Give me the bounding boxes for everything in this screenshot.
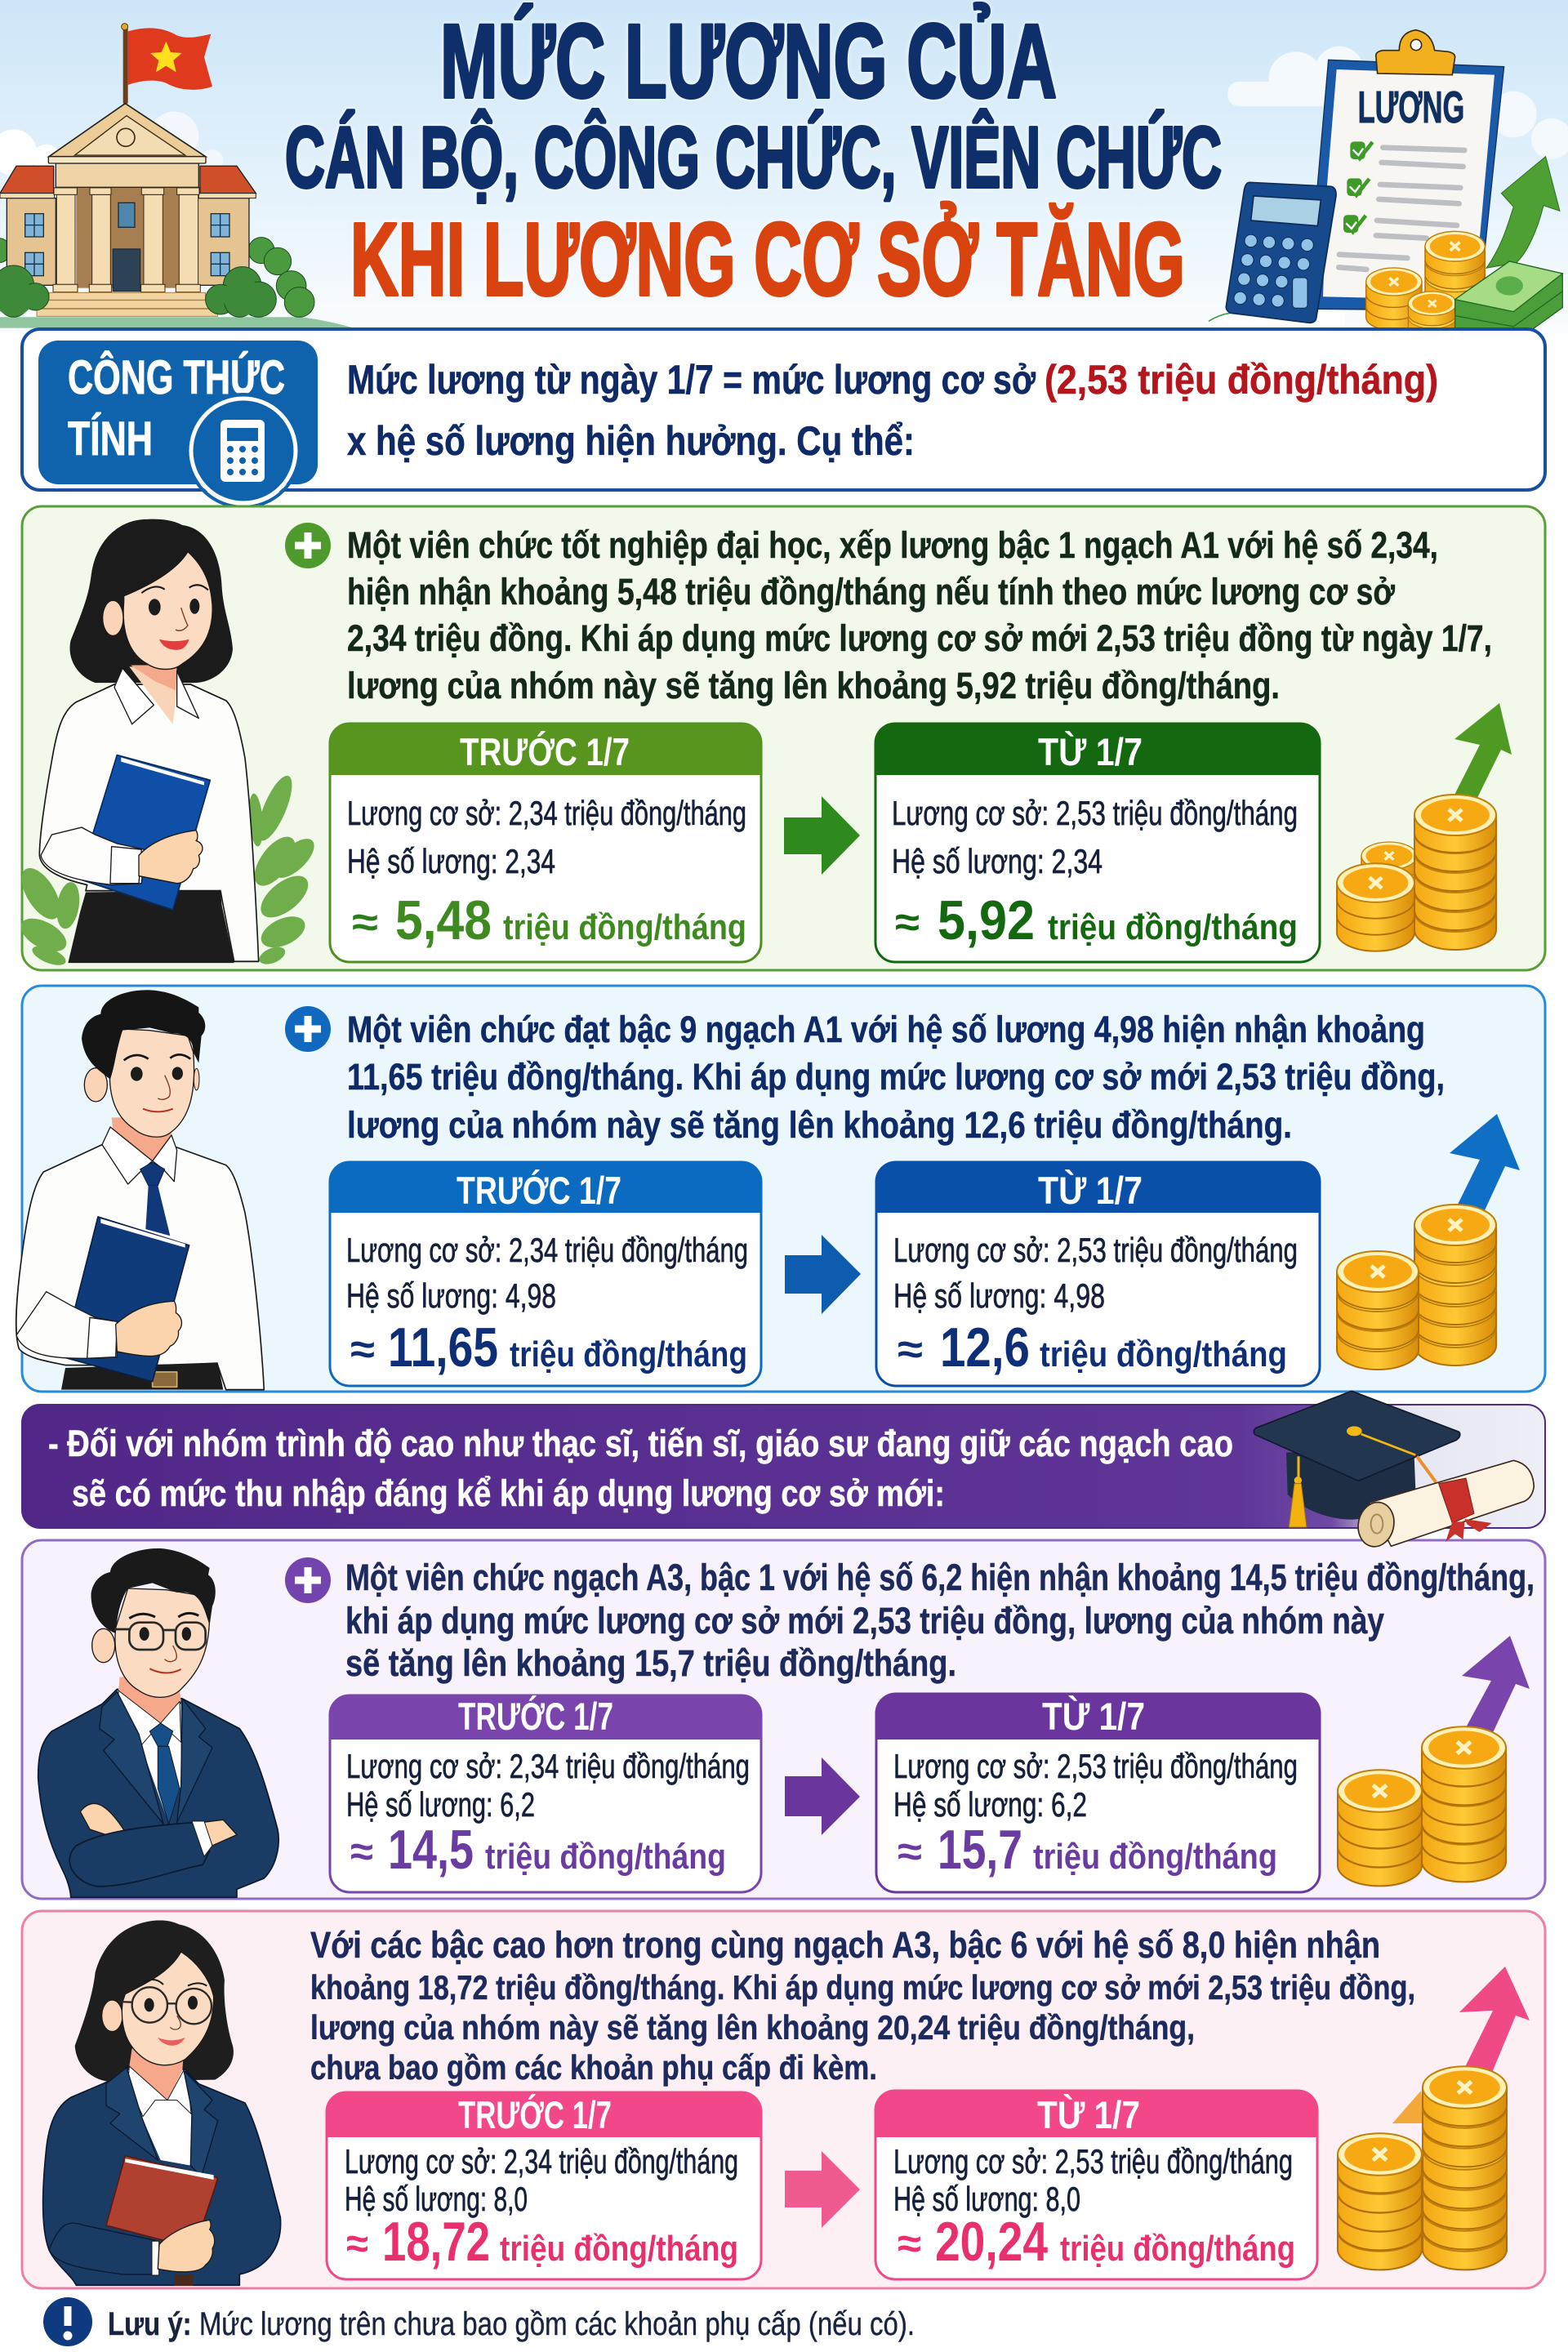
- card: from 1/7: Hệ số lương: 8,0: [893, 2180, 1080, 2218]
- description text: [310, 1924, 1415, 2087]
- card: before 1/7: ≈: [346, 2221, 368, 2266]
- card: before 1/7: TRƯỚC 1/7: [458, 1695, 613, 1738]
- icon: salary clipboard, calculator, coins and cash: [1209, 30, 1568, 343]
- card: before 1/7: Lương cơ sở: 2,34 triệu đồng/tháng: [346, 1231, 748, 1269]
- card: from 1/7: Hệ số lương: 4,98: [893, 1276, 1105, 1315]
- card: from 1/7: [876, 1162, 1320, 1386]
- card: before 1/7: 11,65: [388, 1316, 498, 1379]
- card: from 1/7: 5,92: [938, 889, 1035, 951]
- description text: Với các bậc cao hơn trong cùng ngạch A3, bậc 6 với hệ số 8,0 hiện nhận: [310, 1924, 1380, 1966]
- banner text: sẽ có mức thu nhập đáng kể khi áp dụng lương cơ sở mới:: [72, 1472, 945, 1514]
- card: before 1/7: 14,5: [388, 1819, 474, 1881]
- card: from 1/7: triệu đồng/tháng: [1033, 1837, 1277, 1877]
- card: from 1/7: 12,6: [940, 1316, 1030, 1379]
- description text: [347, 524, 1492, 706]
- card: before 1/7: Lương cơ sở: 2,34 triệu đồng/tháng: [345, 2142, 738, 2180]
- card: before 1/7: Hệ số lương: 4,98: [346, 1276, 556, 1315]
- card: before 1/7: Hệ số lương: 2,34: [347, 842, 555, 880]
- card: before 1/7: triệu đồng/tháng: [510, 1334, 747, 1374]
- description text: sẽ tăng lên khoảng 15,7 triệu đồng/tháng.: [345, 1642, 956, 1684]
- card: from 1/7: TỪ 1/7: [1042, 1695, 1145, 1738]
- card: before 1/7: 18,72: [382, 2211, 490, 2273]
- icon: exclamation: [43, 2297, 92, 2346]
- card: from 1/7: 20,24: [935, 2211, 1048, 2273]
- description text: hiện nhận khoảng 5,48 triệu đồng/tháng nếu tính theo mức lương cơ sở: [347, 571, 1395, 612]
- card: from 1/7: [875, 724, 1320, 962]
- panel: formula: [22, 329, 1545, 507]
- card: from 1/7: 15,7: [938, 1819, 1022, 1881]
- icon: graduation cap and diploma: [1254, 1391, 1534, 1550]
- card: from 1/7: Lương cơ sở: 2,53 triệu đồng/tháng: [893, 1747, 1298, 1785]
- card: from 1/7: ≈: [898, 2221, 921, 2266]
- description text: lương của nhóm này sẽ tăng lên khoảng 20,24 triệu đồng/tháng,: [310, 2008, 1195, 2047]
- banner text: [48, 1423, 1233, 1514]
- card: before 1/7: triệu đồng/tháng: [503, 907, 746, 947]
- panel: blue example: [16, 986, 1545, 1392]
- card: from 1/7: Hệ số lương: 6,2: [893, 1785, 1087, 1824]
- description text: [347, 1009, 1445, 1146]
- illustration: woman with glasses and red book: [43, 1920, 281, 2286]
- banner: higher qualification group: [22, 1391, 1545, 1550]
- arrow: [784, 796, 860, 875]
- title: [285, 3, 1222, 317]
- card: before 1/7: [330, 1162, 761, 1386]
- description text: [345, 1557, 1535, 1684]
- card: before 1/7: Lương cơ sở: 2,34 triệu đồng/tháng: [347, 794, 746, 832]
- card: from 1/7: ≈: [898, 1326, 923, 1372]
- card: from 1/7: Lương cơ sở: 2,53 triệu đồng/tháng: [893, 2142, 1293, 2180]
- icon: coins with rising arrow: [1338, 1636, 1530, 1886]
- note: Lưu ý: Mức lương trên chưa bao gồm các khoản phụ cấp (nếu có).: [108, 2306, 915, 2342]
- description text: lương của nhóm này sẽ tăng lên khoảng 5,92 triệu đồng/tháng.: [347, 665, 1280, 706]
- icon: coins with rising arrow: [1337, 703, 1512, 951]
- card: before 1/7: [330, 724, 761, 962]
- icon: plus: [285, 1557, 331, 1603]
- description text: lương của nhóm này sẽ tăng lên khoảng 12,6 triệu đồng/tháng.: [347, 1104, 1292, 1146]
- icon: coins with rising arrow: [1337, 1114, 1520, 1370]
- icon: salary clipboard, calculator, coins and cash: LƯƠNG: [1358, 82, 1464, 132]
- panel: pink example: [22, 1911, 1545, 2288]
- panel: green example: [14, 506, 1545, 970]
- header banner: [0, 0, 1568, 343]
- icon: plus: [285, 523, 331, 568]
- card: before 1/7: 5,48: [395, 889, 492, 951]
- arrow: [785, 1235, 861, 1314]
- note: [43, 2297, 915, 2346]
- card: from 1/7: Lương cơ sở: 2,53 triệu đồng/tháng: [893, 1231, 1298, 1269]
- card: before 1/7: triệu đồng/tháng: [485, 1837, 726, 1877]
- icon: calculator: [187, 394, 300, 507]
- card: from 1/7: triệu đồng/tháng: [1048, 907, 1298, 947]
- icon: plus: [285, 1006, 331, 1052]
- card: before 1/7: ≈: [350, 1326, 375, 1372]
- card: from 1/7: Lương cơ sở: 2,53 triệu đồng/tháng: [892, 794, 1298, 832]
- card: from 1/7: TỪ 1/7: [1038, 730, 1143, 773]
- panel: purple example: [22, 1540, 1545, 1899]
- card: from 1/7: triệu đồng/tháng: [1060, 2229, 1295, 2269]
- card: from 1/7: triệu đồng/tháng: [1040, 1334, 1287, 1374]
- illustration: woman with blue book: [14, 519, 320, 969]
- card: from 1/7: ≈: [895, 899, 920, 945]
- badge: công thức tính: TÍNH: [68, 412, 153, 466]
- card: from 1/7: TỪ 1/7: [1038, 1169, 1143, 1212]
- illustration: man with glasses in navy suit: [38, 1548, 278, 1897]
- arrow: [785, 1757, 860, 1835]
- card: before 1/7: ≈: [352, 899, 378, 945]
- card: before 1/7: triệu đồng/tháng: [500, 2229, 738, 2269]
- badge: công thức tính: [38, 341, 318, 507]
- icon: government building with flag: [0, 24, 354, 328]
- card: before 1/7: Hệ số lương: 8,0: [345, 2180, 528, 2218]
- card: before 1/7: Lương cơ sở: 2,34 triệu đồng/tháng: [346, 1747, 750, 1785]
- card: from 1/7: TỪ 1/7: [1037, 2093, 1140, 2136]
- card: from 1/7: [876, 1694, 1320, 1892]
- illustration: man with blue folder: [16, 990, 264, 1390]
- card: from 1/7: ≈: [898, 1829, 922, 1874]
- card: before 1/7: [330, 1695, 761, 1892]
- arrow: [785, 2151, 860, 2228]
- badge: công thức tính: CÔNG THỨC: [68, 351, 285, 404]
- banner text: - Đối với nhóm trình độ cao như thạc sĩ, tiến sĩ, giáo sư đang giữ các ngạch cao: [48, 1423, 1233, 1464]
- card: before 1/7: [327, 2092, 761, 2279]
- card: before 1/7: Hệ số lương: 6,2: [346, 1785, 535, 1824]
- card: before 1/7: TRƯỚC 1/7: [458, 2093, 612, 2136]
- card: before 1/7: TRƯỚC 1/7: [457, 1169, 621, 1212]
- icon: coins with rising arrow: [1338, 1967, 1530, 2270]
- card: from 1/7: Hệ số lương: 2,34: [892, 842, 1102, 880]
- formula text: x hệ số lương hiện hưởng. Cụ thể:: [347, 418, 915, 464]
- card: before 1/7: ≈: [350, 1829, 373, 1874]
- card: from 1/7: [875, 2091, 1317, 2279]
- formula text: Mức lương từ ngày 1/7 = mức lương cơ sở: [347, 357, 1036, 403]
- description text: chưa bao gồm các khoản phụ cấp đi kèm.: [310, 2048, 877, 2087]
- formula text: (2,53 triệu đồng/tháng): [1045, 357, 1438, 403]
- title: MỨC LƯƠNG CỦA: [440, 3, 1057, 120]
- card: before 1/7: TRƯỚC 1/7: [460, 730, 630, 773]
- formula text: [347, 357, 1438, 464]
